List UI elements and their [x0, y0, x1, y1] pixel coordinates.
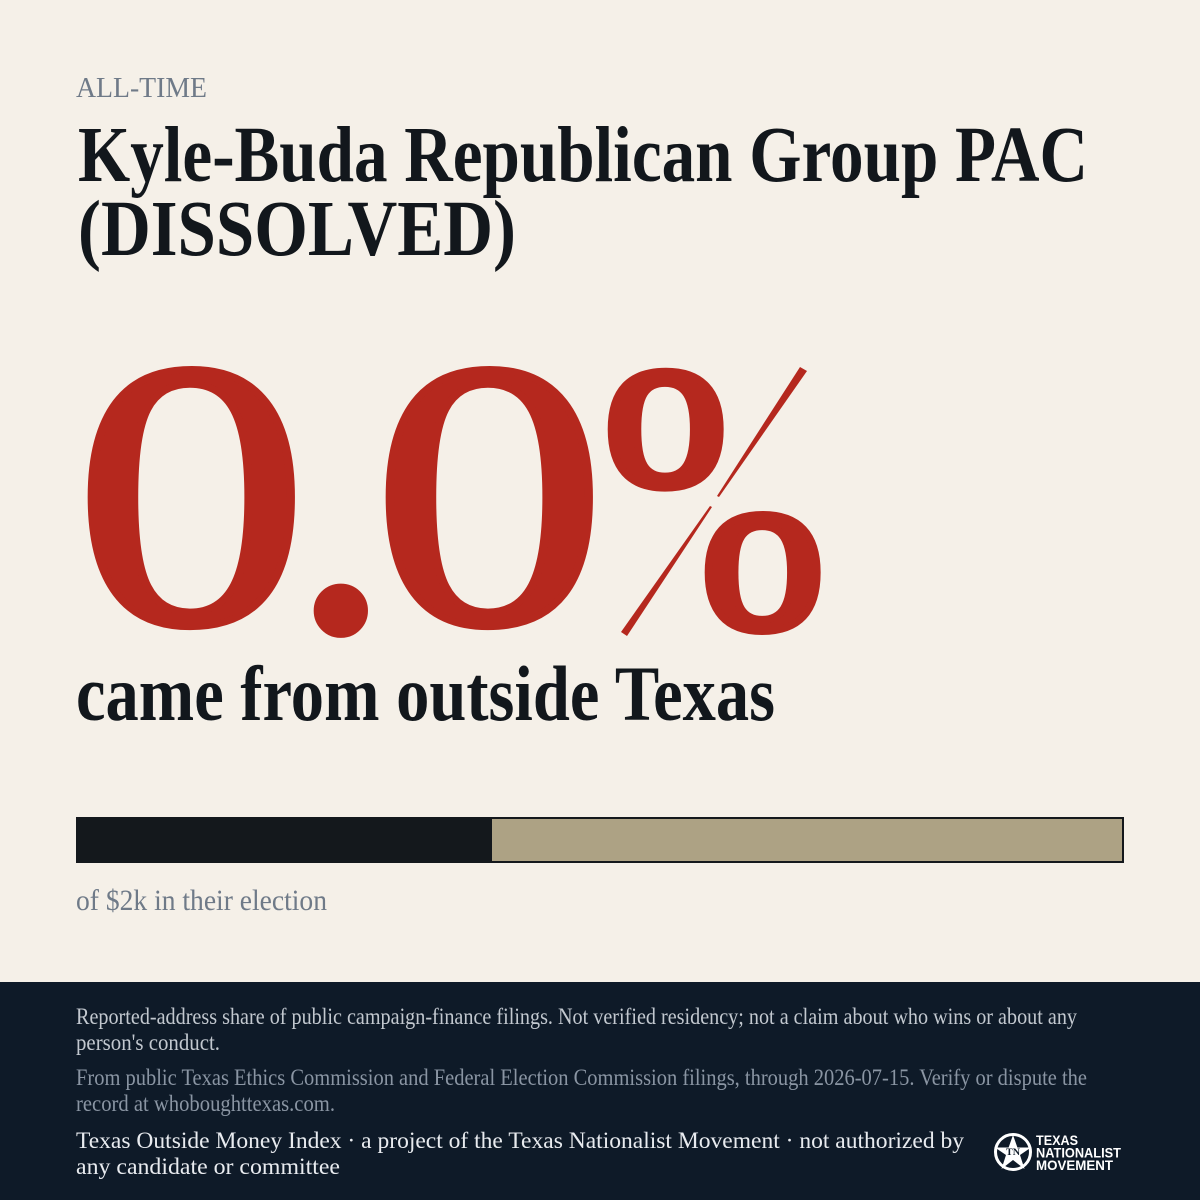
icon: Texas Nationalist Movement logo: TEXAS — [1036, 1133, 1078, 1148]
disclaimer text: Reported-address share of public campaign-finance filings. Not verified residency; not a claim about who wins or about any — [76, 1004, 1077, 1029]
source text — [76, 1065, 1087, 1116]
big percentage figure: % — [600, 299, 883, 656]
attribution text — [76, 1128, 964, 1179]
title: (DISSOLVED) — [78, 186, 516, 273]
eyebrow: time period: ALL-TIME — [76, 72, 207, 104]
attribution text: Texas Outside Money Index · a project of the Texas Nationalist Movement · not authorized by — [76, 1128, 964, 1153]
disclaimer text: person's conduct. — [76, 1030, 220, 1055]
subheading: came from outside Texas — [76, 650, 775, 737]
icon: Texas Nationalist Movement logo: TN — [1006, 1147, 1021, 1157]
bar caption: of $2k in their election — [76, 884, 327, 917]
footer panel — [0, 982, 1200, 1200]
big percentage figure — [88, 366, 821, 638]
big percentage figure: . — [290, 267, 392, 717]
big percentage figure: % — [545, 340, 828, 697]
big percentage figure: 0 — [74, 284, 309, 706]
source text: record at whoboughttexas.com. — [76, 1091, 335, 1116]
icon: Texas Nationalist Movement logo: MOVEMENT — [1036, 1158, 1114, 1173]
big percentage figure: 0 — [372, 284, 607, 706]
title — [78, 112, 1088, 273]
disclaimer text — [76, 1004, 1077, 1055]
icon: Texas Nationalist Movement logo — [995, 1133, 1122, 1173]
progress bar — [76, 817, 1123, 863]
source text: From public Texas Ethics Commission and Federal Election Commission filings, through 2026-07-15. Verify or dispute the — [76, 1065, 1087, 1090]
attribution text: any candidate or committee — [76, 1154, 340, 1179]
icon: Texas Nationalist Movement logo: NATIONALIST — [1036, 1146, 1122, 1160]
